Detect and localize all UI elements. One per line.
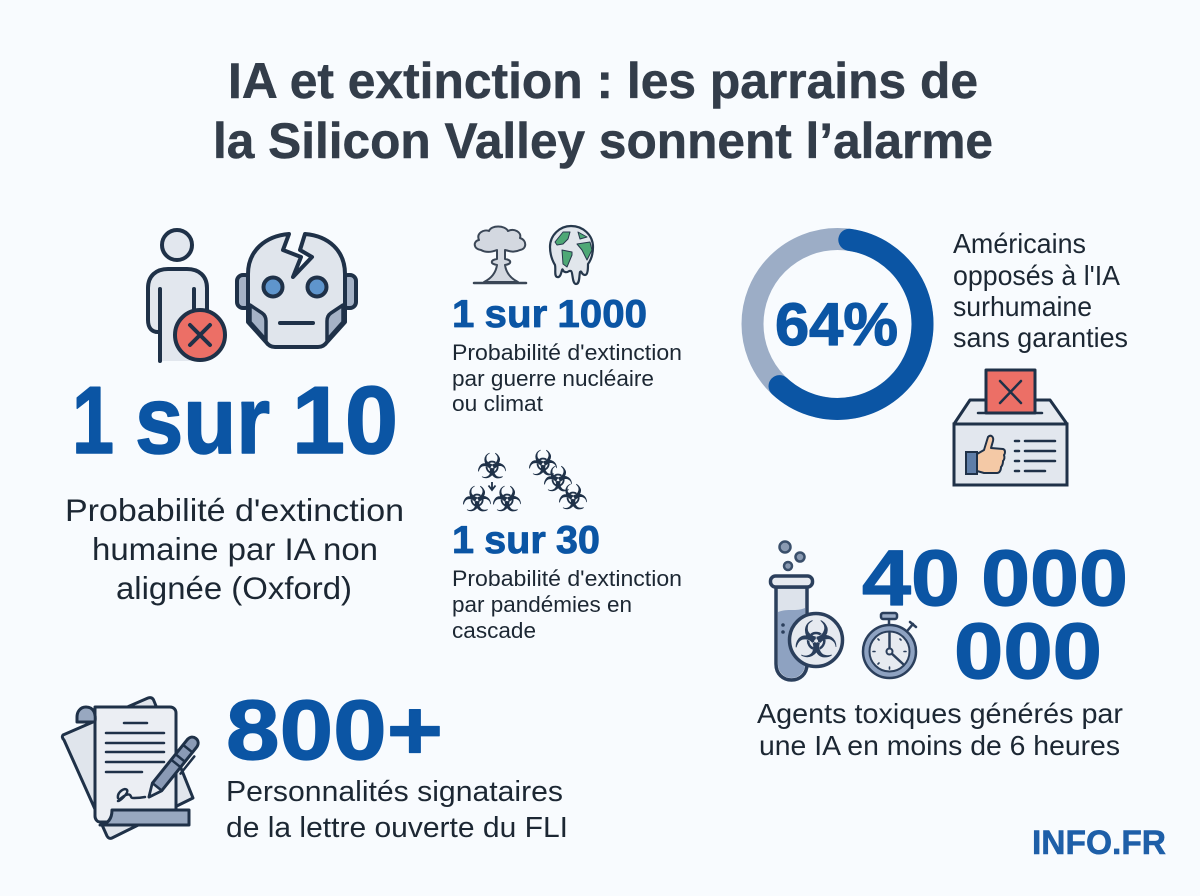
icon: mushroom cloud xyxy=(474,226,526,283)
donut chart: 64%: 64% xyxy=(775,291,898,358)
caption: 800+ xyxy=(226,776,568,844)
title: IA et extinction : les parrains de xyxy=(228,53,978,109)
big number: 1 sur 10 xyxy=(72,367,398,474)
caption: 40 000 000: une IA en moins de 6 heures xyxy=(759,730,1120,761)
icon: signed document with pen xyxy=(62,698,204,838)
caption: 1 sur 30: Probabilité d'extinction xyxy=(452,566,682,591)
caption: 1 sur 30 xyxy=(452,566,682,643)
icon: biohazard symbols cascade: ☣ xyxy=(543,460,573,500)
caption: 64%: Américains xyxy=(953,228,1086,259)
icon: ballot box xyxy=(954,370,1067,485)
caption: 1 sur 10 xyxy=(65,492,404,606)
caption: 1 sur 10: alignée (Oxford) xyxy=(116,570,352,606)
caption: 1 sur 10: humaine par IA non xyxy=(92,531,378,567)
icon: test tube with biohazard: ☣ xyxy=(794,611,838,669)
caption: 800+: Personnalités signataires xyxy=(226,776,563,808)
logo: INFO.FR: INFO.FR xyxy=(1032,824,1166,862)
caption: 40 000 000: Agents toxiques générés par xyxy=(757,698,1123,729)
title: la Silicon Valley sonnent l’alarme xyxy=(213,113,993,169)
caption: 64%: surhumaine xyxy=(953,291,1092,322)
icon: biohazard symbols cascade: ☣ xyxy=(558,478,588,518)
caption: 1 sur 1000: par guerre nucléaire xyxy=(452,366,654,391)
caption: 64% xyxy=(953,228,1128,353)
caption: 1 sur 1000: Probabilité d'extinction xyxy=(452,340,682,365)
icon: biohazard symbols cascade xyxy=(462,444,588,520)
stat: 1 sur 1000: 1 sur 1000 xyxy=(452,293,647,336)
caption: 1 sur 10: Probabilité d'extinction xyxy=(65,492,404,528)
caption: 1 sur 30: par pandémies en xyxy=(452,592,632,617)
icon: stopwatch xyxy=(863,613,916,678)
panel: 800+ xyxy=(62,683,568,844)
big number: 40 000 000 xyxy=(862,533,1128,695)
caption: 1 sur 1000: ou climat xyxy=(452,391,543,416)
title xyxy=(213,53,993,169)
big number: 1 sur 10: 1 xyxy=(72,367,114,474)
icon: biohazard symbols cascade: ☣ xyxy=(528,444,558,484)
caption: 800+: de la lettre ouverte du FLI xyxy=(226,812,568,844)
icon: melting earth xyxy=(550,226,593,284)
icon: person with red cross xyxy=(148,230,225,361)
caption: 1 sur 1000 xyxy=(452,340,682,416)
panel: 1 sur 10 xyxy=(65,230,404,606)
panel: 64% xyxy=(752,228,1128,485)
caption: 40 000 000 xyxy=(757,698,1123,761)
caption: 1 sur 30: cascade xyxy=(452,618,536,643)
icon: test tube with biohazard xyxy=(770,542,842,680)
caption: 64%: opposés à l'IA xyxy=(953,260,1120,291)
stat: 1 sur 30: 1 sur 30 xyxy=(452,519,600,562)
big number: 1 sur 10: 10 xyxy=(292,367,398,474)
icon: cracked robot head xyxy=(237,234,356,347)
icon: biohazard symbols cascade: ☣ xyxy=(462,480,492,520)
donut chart: 64% xyxy=(752,239,923,409)
panel: 1 sur 1000 xyxy=(452,226,682,416)
panel: 1 sur 30 xyxy=(452,444,682,643)
big number: 800+: 800+ xyxy=(226,683,443,777)
panel: 40 000 000 xyxy=(757,533,1128,761)
big number: 40 000 000: 40 000 xyxy=(862,533,1128,622)
big number: 1 sur 10: sur xyxy=(135,367,270,474)
caption: 64%: sans garanties xyxy=(953,322,1128,353)
big number: 40 000 000: 000 xyxy=(954,606,1102,695)
icon: biohazard symbols cascade: ☣ xyxy=(492,480,522,520)
icon: biohazard symbols cascade: ☣ xyxy=(477,447,507,487)
